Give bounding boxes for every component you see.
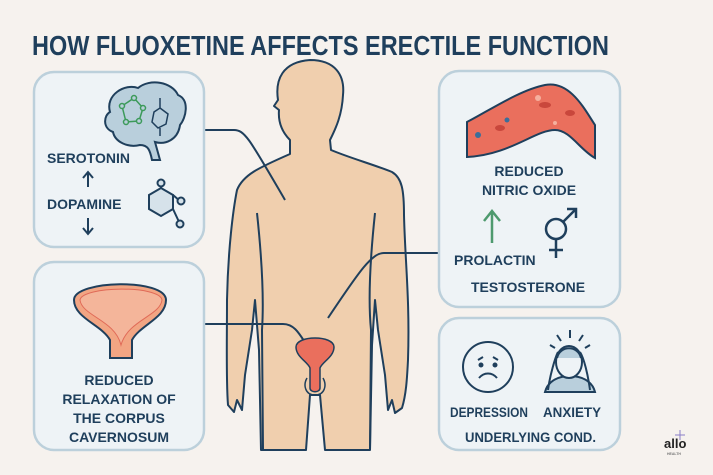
icon: benzene ring: [149, 180, 184, 228]
panel: nitric oxide hormones: [439, 71, 620, 307]
text: reduced relaxation: REDUCED: [84, 372, 154, 388]
text: reduced relaxation: THE CORPUS: [73, 410, 165, 426]
logo: allo health: [664, 430, 686, 456]
icon: blood vessel: [467, 84, 595, 158]
text: underlying cond: UNDERLYING COND.: [465, 429, 596, 445]
panel: underlying conditions: ANXIETY: [543, 404, 602, 420]
logo: allo health: HEALTH: [667, 452, 681, 456]
icon: bladder: [74, 284, 166, 358]
icon: sad face: [463, 342, 513, 392]
text: reduced nitric oxide: REDUCED: [494, 163, 564, 179]
icon: arrow up: [83, 172, 93, 187]
text: dopamine: DOPAMINE: [47, 196, 121, 212]
text: prolactin: PROLACTIN: [454, 252, 536, 268]
human body silhouette: [227, 60, 408, 450]
icon: arrow down: [83, 218, 93, 234]
panel: underlying conditions: [439, 318, 620, 450]
icon: anxious person: [545, 330, 595, 392]
icon: brain: [105, 82, 186, 160]
title: HOW FLUOXETINE AFFECTS ERECTILE FUNCTION: [32, 30, 609, 61]
text: reduced relaxation: RELAXATION OF: [62, 391, 176, 407]
logo: allo health: allo: [664, 436, 686, 451]
panel: corpus cavernosum: [34, 262, 204, 450]
connector lines: [204, 130, 440, 347]
text: testosterone: TESTOSTERONE: [471, 279, 585, 295]
text: serotonin: SEROTONIN: [47, 150, 130, 166]
text: reduced nitric oxide: NITRIC OXIDE: [482, 182, 576, 198]
text: reduced relaxation: CAVERNOSUM: [69, 429, 169, 445]
text: depression anxiety: DEPRESSION: [450, 404, 528, 420]
panel: serotonin dopamine: [34, 72, 204, 247]
icon: gender symbol: [546, 209, 576, 258]
icon: genital organ: [296, 338, 334, 395]
icon: green arrow up: [484, 211, 500, 243]
